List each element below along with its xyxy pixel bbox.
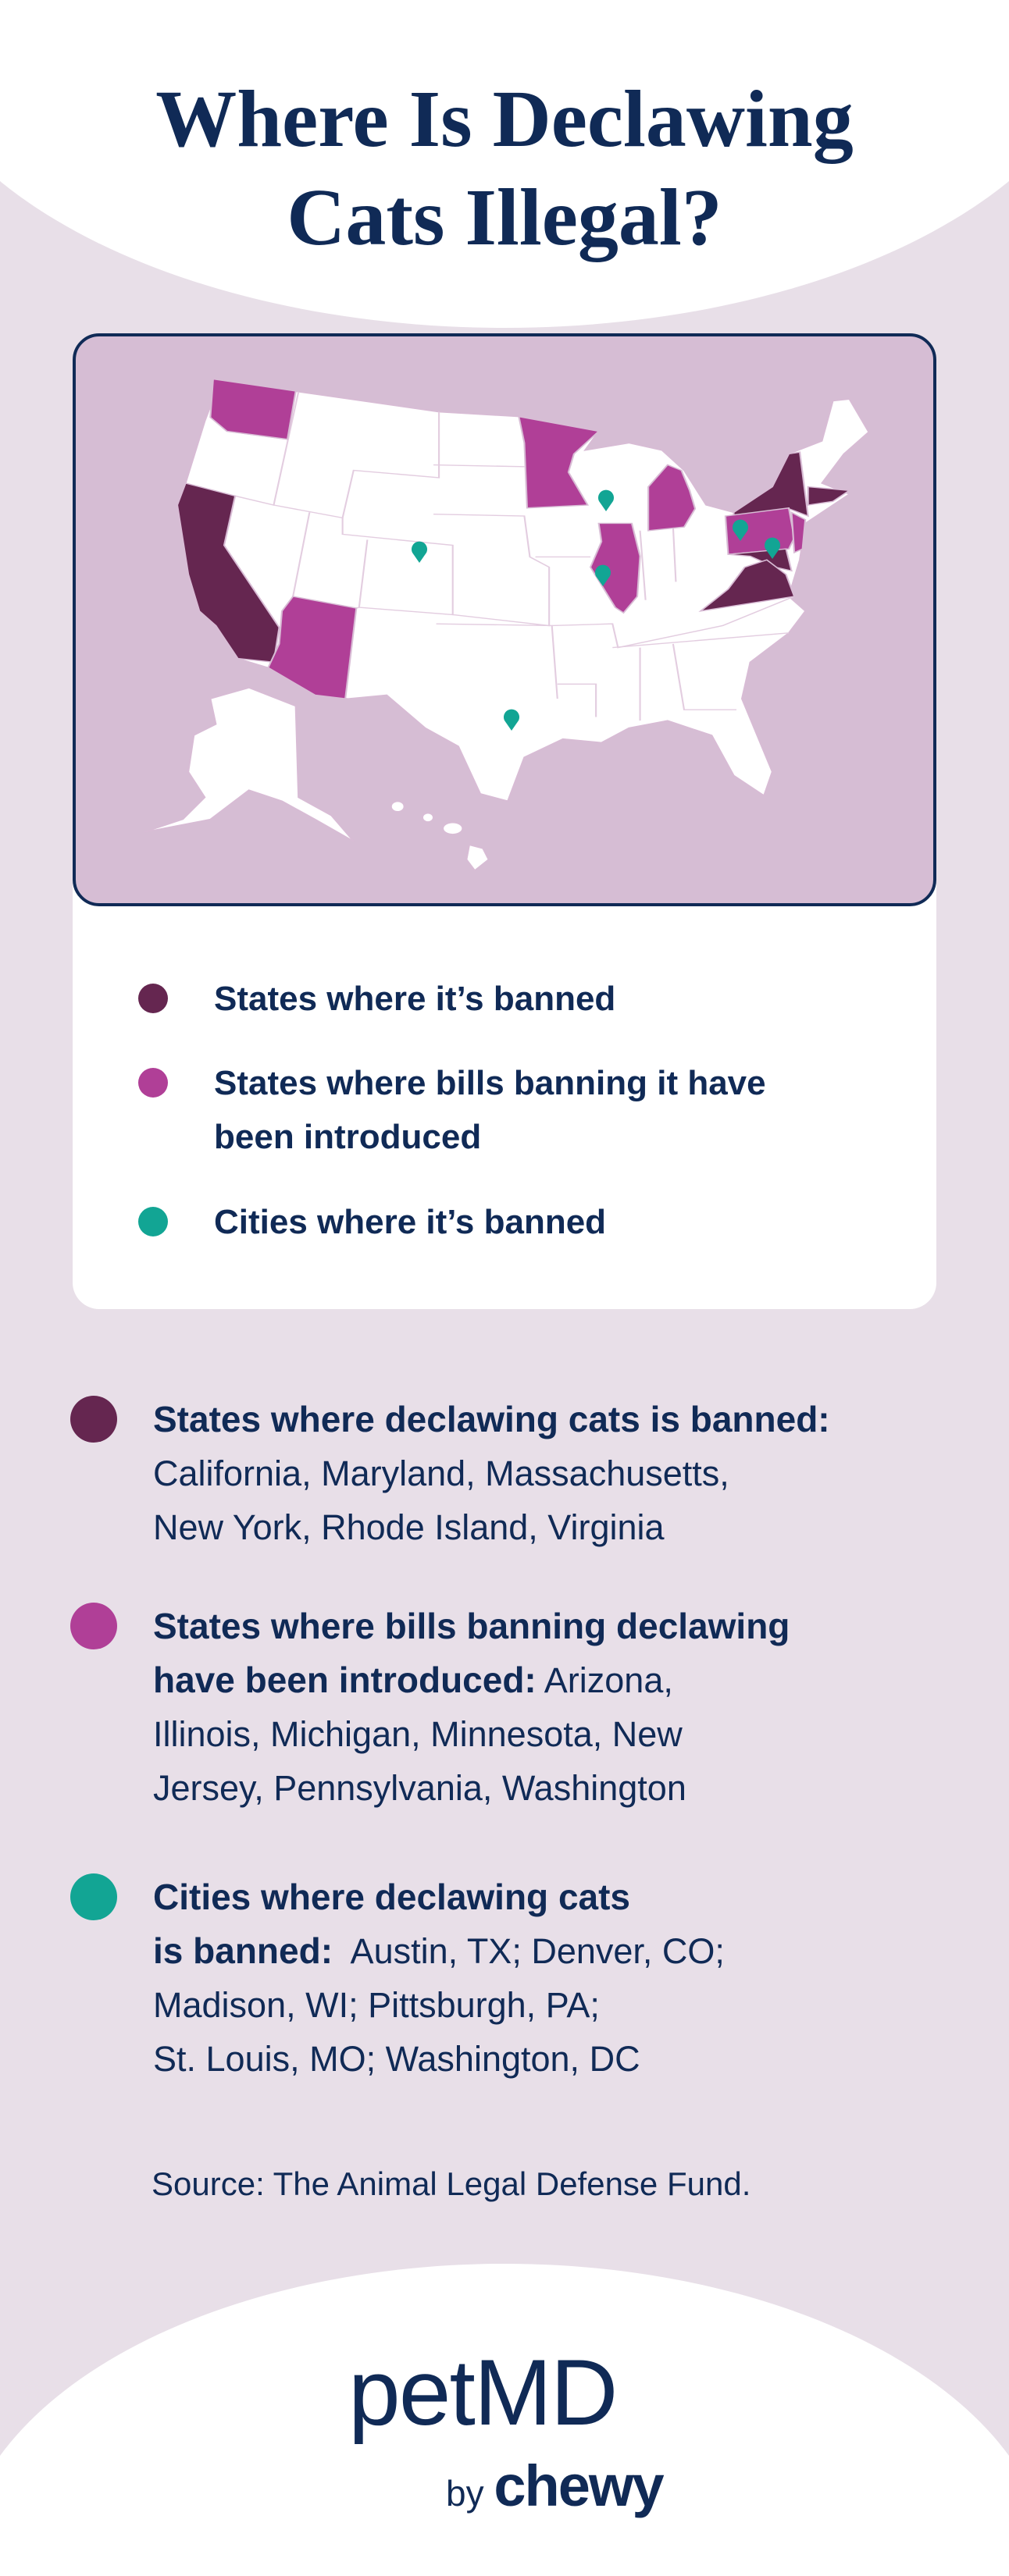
list: cities [70, 1873, 725, 2079]
list: bills introduced [70, 1603, 790, 1808]
map [73, 333, 936, 906]
legend item: bills introduced [138, 1064, 766, 1156]
title: Cats Illegal? [287, 173, 722, 262]
list: bills introduced: Jersey, Pennsylvania, Washington [153, 1768, 686, 1808]
logo: petMD by chewy: petMD [348, 2340, 616, 2445]
panel: map card [73, 333, 936, 1309]
list: bills introduced: have been introduced: Arizona, [153, 1660, 673, 1700]
list: cities: St. Louis, MO; Washington, DC [153, 2039, 640, 2079]
legend item: bills introduced: been introduced [214, 1118, 481, 1156]
logo: petMD by chewy: by chewy [446, 2453, 663, 2518]
list: banned states: States where declawing cats is banned: [153, 1399, 830, 1439]
list: cities: is banned: Austin, TX; Denver, CO; [153, 1930, 725, 1971]
list: bills introduced: States where bills banning declawing [153, 1606, 790, 1646]
list: cities: Cities where declawing cats [153, 1877, 630, 1917]
list: cities: Madison, WI; Pittsburgh, PA; [153, 1985, 600, 2025]
legend item: banned states: States where it’s banned [214, 980, 615, 1018]
legend item: cities: Cities where it’s banned [214, 1203, 606, 1241]
legend item: bills introduced: States where bills banning it have [214, 1064, 766, 1102]
list: banned states [70, 1396, 830, 1547]
list: banned states: New York, Rhode Island, Virginia [153, 1507, 665, 1547]
list: bills introduced: Illinois, Michigan, Minnesota, New [153, 1714, 683, 1754]
logo: petMD by chewy [348, 2340, 664, 2518]
source: Source: The Animal Legal Defense Fund. [152, 2165, 751, 2202]
title: Where Is Declawing [155, 74, 854, 164]
title [155, 74, 854, 262]
list: banned states: California, Maryland, Massachusetts, [153, 1453, 729, 1493]
